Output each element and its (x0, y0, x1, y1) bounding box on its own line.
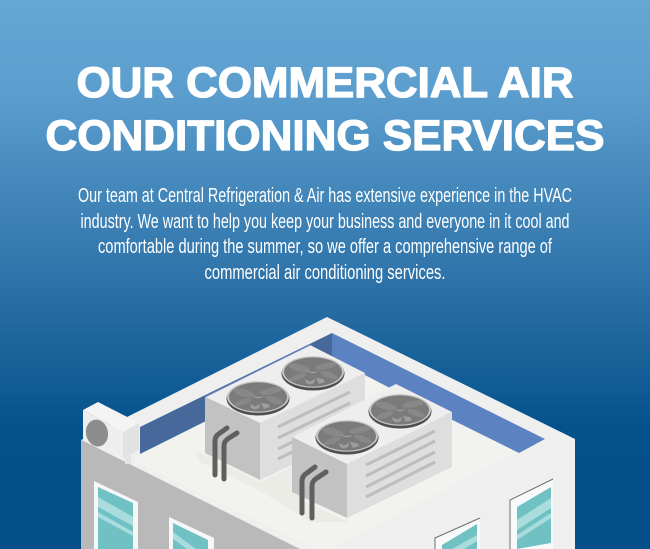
fan (316, 420, 378, 454)
condenser unit 1 (205, 345, 365, 480)
intro paragraph (78, 184, 572, 284)
parapet inner wall: right blue (332, 333, 545, 453)
refrigerant pipes (215, 428, 237, 479)
fan (368, 394, 432, 428)
title (46, 59, 604, 160)
title: CONDITIONING SERVICES (46, 112, 604, 160)
fan (226, 381, 290, 416)
unit shadow (195, 450, 350, 522)
illustration: isometric commercial building (81, 317, 575, 549)
fan (282, 356, 344, 390)
vent slats (366, 431, 435, 497)
left wall (81, 440, 300, 549)
parapet inner wall: left blue (140, 333, 332, 454)
window: left wall 1 (94, 481, 138, 549)
window: left wall 2 (169, 517, 214, 549)
refrigerant pipes (302, 467, 326, 518)
vent slats (278, 392, 350, 459)
window: right wall small (435, 518, 480, 549)
wall-mounted AC unit (83, 402, 139, 464)
condenser unit 2 (292, 384, 452, 518)
window: right wall large (510, 479, 553, 549)
intro paragraph: commercial air conditioning services. (204, 261, 446, 284)
title: OUR COMMERCIAL AIR (76, 59, 574, 107)
roof floor (133, 358, 519, 549)
building roof slab and right wall (81, 317, 575, 549)
